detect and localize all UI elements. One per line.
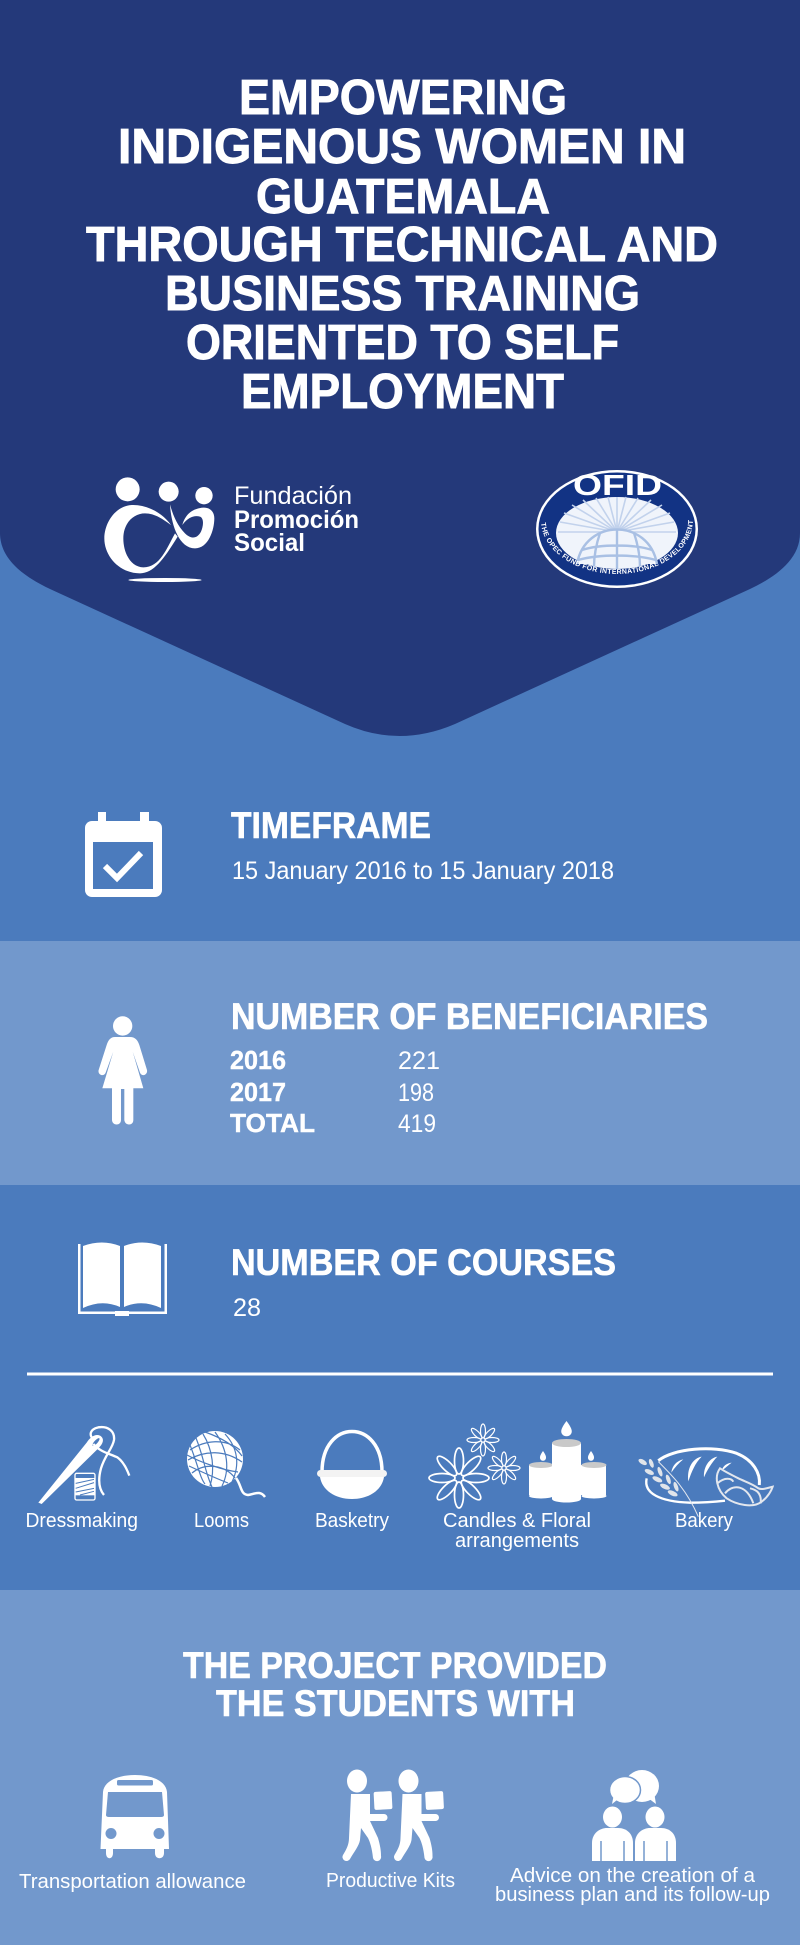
course: basketry bbox=[315, 1432, 389, 1532]
panel: header shape bbox=[0, 0, 800, 736]
heading: number of courses: NUMBER OF COURSES bbox=[231, 1242, 616, 1283]
logo: OFID: OFID bbox=[573, 470, 662, 502]
icon: candles bbox=[529, 1421, 606, 1502]
course: candles and floral arrangements: arrangements bbox=[455, 1530, 579, 1552]
title: EMPOWERING bbox=[239, 71, 567, 125]
icon: open book bbox=[78, 1242, 167, 1316]
heading: timeframe: TIMEFRAME bbox=[231, 805, 431, 846]
course: candles and floral arrangements bbox=[429, 1421, 606, 1552]
heading: the project provided the students with: THE STUDENTS WITH bbox=[216, 1683, 575, 1724]
panel: project provided background bbox=[0, 1590, 800, 1945]
table: beneficiaries by year bbox=[230, 1045, 440, 1138]
course: looms bbox=[187, 1431, 265, 1532]
icon: people carrying boxes bbox=[342, 1770, 444, 1861]
course: bakery: Bakery bbox=[675, 1510, 733, 1532]
course: basketry: Basketry bbox=[315, 1510, 389, 1532]
item: business plan advice bbox=[495, 1770, 770, 1906]
course: candles and floral arrangements: Candles & Floral bbox=[443, 1510, 591, 1532]
title: EMPLOYMENT bbox=[241, 365, 564, 419]
title: THROUGH TECHNICAL AND bbox=[86, 218, 718, 272]
table: beneficiaries by year: 2016 bbox=[230, 1045, 286, 1075]
table: beneficiaries by year: 2017 bbox=[230, 1077, 286, 1107]
item: transportation allowance bbox=[19, 1775, 246, 1893]
icon: flowers bbox=[429, 1424, 520, 1508]
icon: yarn ball bbox=[187, 1431, 265, 1497]
title: BUSINESS TRAINING bbox=[165, 267, 640, 321]
text: course count: 28 bbox=[233, 1294, 261, 1322]
course: looms: Looms bbox=[194, 1510, 249, 1532]
logo: Fundación Promoción Social: Fundación bbox=[234, 482, 352, 510]
item: transportation allowance: Transportation allowance bbox=[19, 1871, 246, 1893]
icon: bread, wheat and croissant bbox=[637, 1449, 773, 1517]
title bbox=[86, 71, 718, 419]
panel: beneficiaries background bbox=[0, 941, 800, 1185]
icon: infinity figures bbox=[104, 477, 214, 582]
course: bakery bbox=[637, 1449, 773, 1532]
table: beneficiaries by year: 198 bbox=[398, 1079, 434, 1107]
item: productive kits: Productive Kits bbox=[326, 1870, 455, 1892]
logo: Fundación Promoción Social bbox=[104, 477, 359, 582]
table: beneficiaries by year: TOTAL bbox=[230, 1108, 315, 1138]
item: business plan advice: Advice on the creation of a bbox=[510, 1865, 756, 1887]
title: ORIENTED TO SELF bbox=[186, 316, 619, 370]
icon: basket bbox=[317, 1432, 387, 1499]
table: beneficiaries by year: 221 bbox=[398, 1047, 440, 1075]
logo: OFID bbox=[536, 470, 698, 588]
icon: needle and thread bbox=[38, 1427, 129, 1504]
logo: OFID: THE OPEC FUND FOR INTERNATIONAL DEVELOPMENT bbox=[541, 520, 693, 574]
heading: number of beneficiaries: NUMBER OF BENEFICIARIES bbox=[231, 996, 708, 1037]
heading: the project provided the students with bbox=[183, 1645, 607, 1724]
icon: two people talking bbox=[592, 1770, 676, 1861]
item: productive kits bbox=[326, 1770, 455, 1892]
course: dressmaking: Dressmaking bbox=[26, 1510, 138, 1532]
logo: Fundación Promoción Social: Promoción bbox=[234, 506, 359, 534]
icon: bus bbox=[100, 1775, 169, 1858]
title: GUATEMALA bbox=[256, 170, 550, 224]
sun rays bbox=[558, 497, 676, 532]
table: beneficiaries by year: 419 bbox=[398, 1110, 436, 1138]
icon: calendar bbox=[85, 812, 162, 897]
item: business plan advice: business plan and its follow-up bbox=[495, 1884, 770, 1906]
globe bbox=[577, 530, 657, 569]
logo: Fundación Promoción Social: Social bbox=[234, 529, 305, 557]
text: timeframe dates: 15 January 2016 to 15 January 2018 bbox=[232, 857, 614, 885]
course: dressmaking bbox=[26, 1427, 138, 1532]
icon: woman bbox=[98, 1016, 147, 1124]
heading: the project provided the students with: THE PROJECT PROVIDED bbox=[183, 1645, 607, 1686]
title: INDIGENOUS WOMEN IN bbox=[118, 120, 686, 174]
